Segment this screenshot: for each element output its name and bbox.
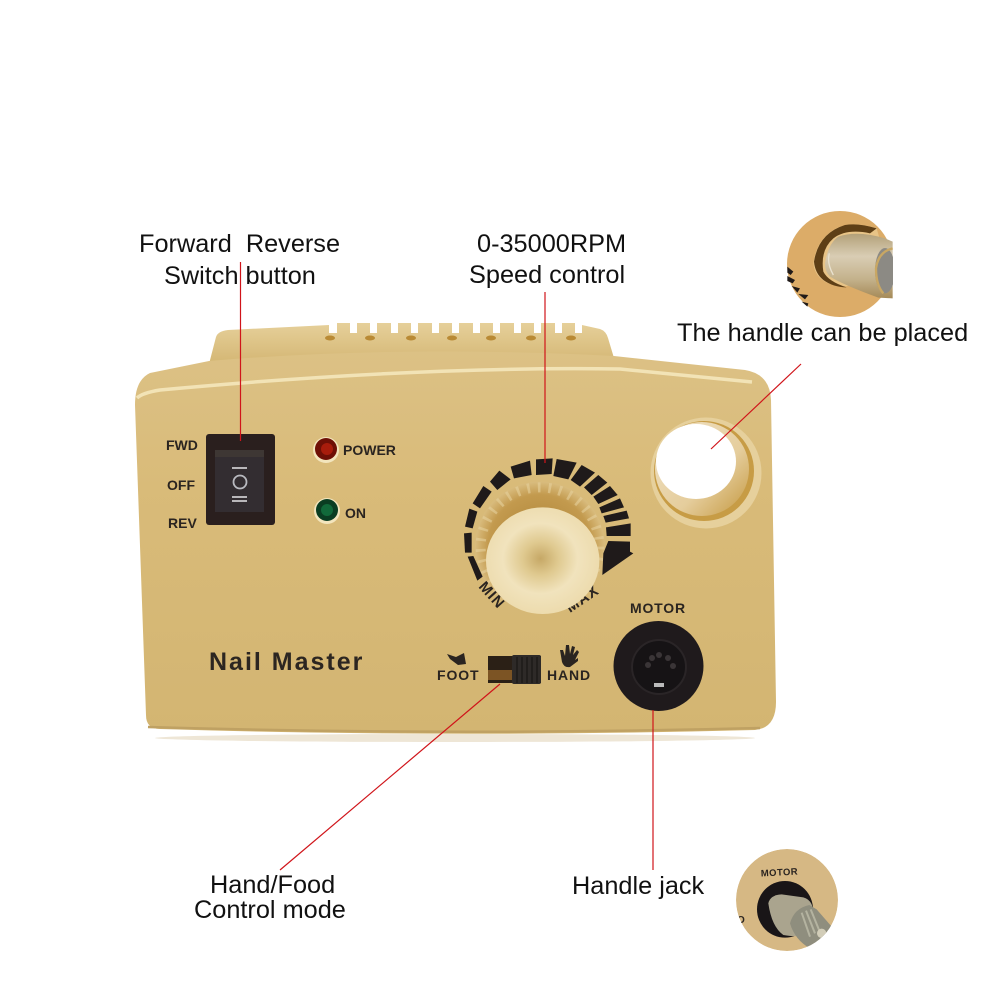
foot/hand slide switch: FOOT bbox=[437, 667, 479, 683]
inset photo: handle plugged into motor jack: O bbox=[737, 915, 745, 926]
rear housing with vents bbox=[209, 323, 614, 364]
handle holder hole bbox=[650, 418, 762, 528]
power LED: POWER bbox=[343, 442, 396, 458]
power LED bbox=[313, 437, 396, 463]
callout: hand/foot control mode: Hand/Food bbox=[210, 871, 335, 899]
callout: forward reverse switch bbox=[139, 230, 340, 441]
callout: forward reverse switch: Forward Reverse bbox=[139, 230, 340, 258]
callout: speed control: 0-35000RPM bbox=[477, 230, 626, 258]
callout: hand/foot control mode bbox=[194, 684, 500, 924]
dial MIN label: MIN bbox=[475, 578, 508, 612]
knob bbox=[486, 507, 599, 614]
switch labels: FWD bbox=[166, 437, 198, 453]
front panel bbox=[135, 352, 776, 734]
motor jack: MOTOR bbox=[630, 600, 686, 616]
vent holes bbox=[325, 336, 576, 340]
inset photo: handle plugged into motor jack: MOTOR bbox=[761, 867, 798, 879]
callout: handle placement: The handle can be placed bbox=[677, 319, 968, 347]
on LED: ON bbox=[345, 505, 366, 521]
callout: hand/foot control mode: Control mode bbox=[194, 896, 346, 924]
foot/hand slide switch: HAND bbox=[547, 667, 591, 683]
rocker switch bbox=[206, 434, 275, 525]
motor jack bbox=[614, 600, 704, 711]
dial MAX label: MAX bbox=[563, 582, 602, 616]
switch labels: OFF bbox=[167, 477, 195, 493]
switch labels: REV bbox=[168, 515, 197, 531]
switch labels bbox=[166, 437, 198, 531]
dial skirt bbox=[475, 482, 605, 612]
speed scale ticks bbox=[464, 458, 633, 581]
on LED bbox=[314, 498, 366, 524]
callout: speed control bbox=[469, 230, 626, 463]
callout: forward reverse switch: Switch button bbox=[164, 262, 316, 290]
inset photo: handle placed in holder bbox=[787, 211, 895, 317]
callout: handle jack: Handle jack bbox=[572, 872, 705, 900]
speed dial bbox=[464, 458, 633, 616]
brand name: Nail Master bbox=[209, 648, 364, 676]
device: gold nail drill control box bbox=[135, 323, 776, 742]
callout: speed control: Speed control bbox=[469, 261, 625, 289]
foot/hand slide switch bbox=[437, 645, 591, 684]
inset photo: handle plugged into motor jack bbox=[736, 849, 838, 951]
callout: handle placement bbox=[677, 319, 968, 449]
